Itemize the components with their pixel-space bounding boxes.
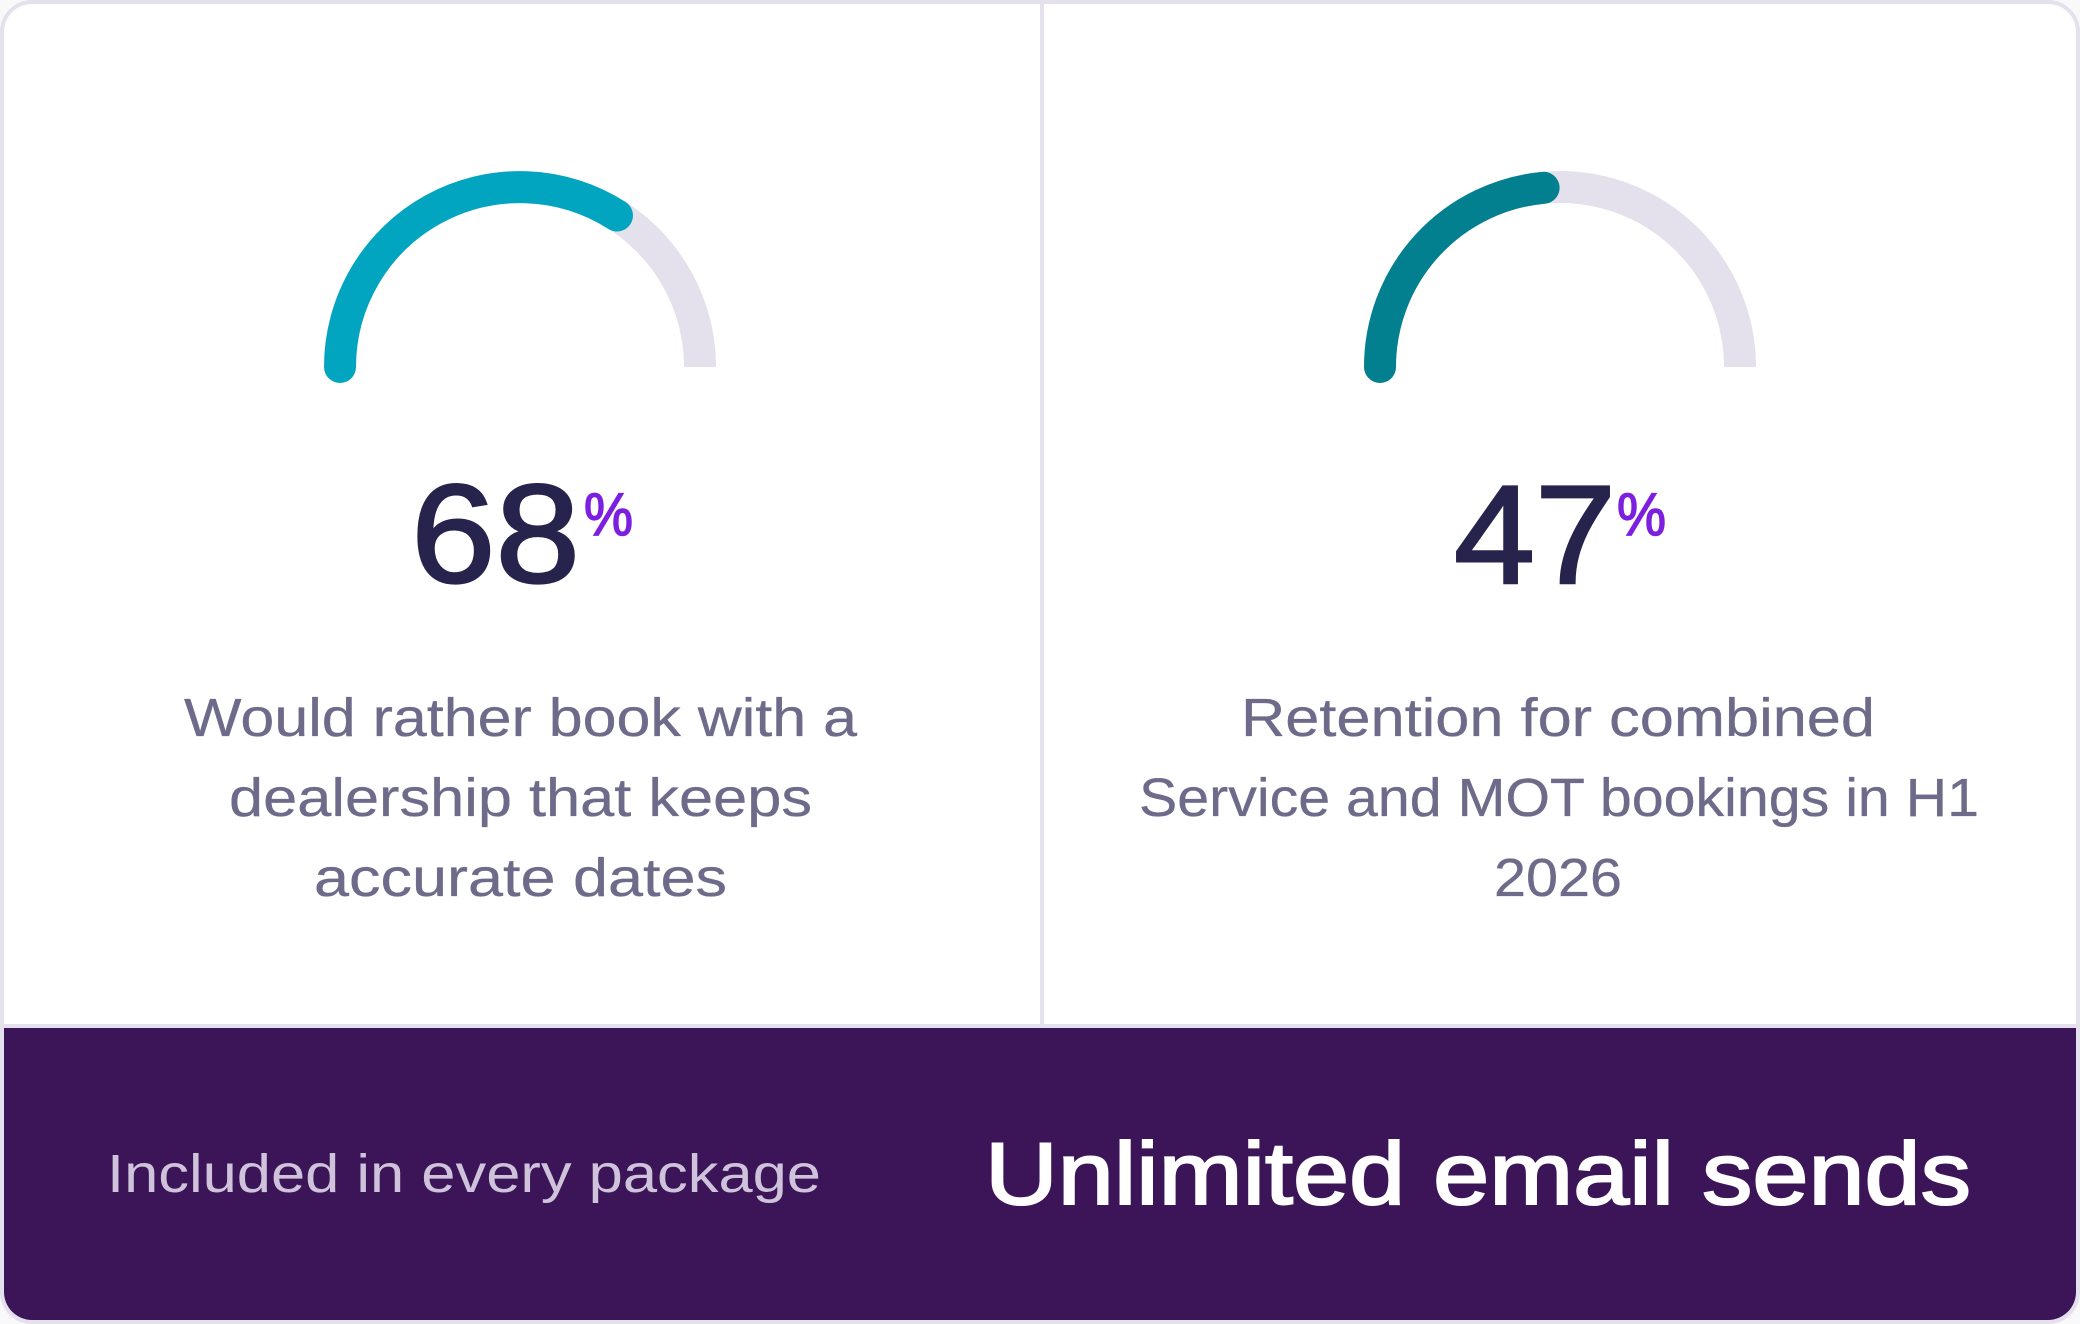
text: 47 percent description: 2026: [1494, 848, 1622, 908]
text: 68 percent description: Would rather book with a: [184, 688, 858, 748]
text: 68 percent description: dealership that keeps: [229, 768, 812, 828]
panel: 68 percent stat: [184, 187, 858, 908]
text: 68 percent description: accurate dates: [314, 848, 727, 908]
text: 68 percent description: [184, 688, 858, 908]
text: banner label: Included in every package: [107, 1144, 821, 1204]
text: 47 percent description: Retention for combined: [1241, 688, 1875, 748]
number: 47%: %: [1617, 481, 1666, 548]
text: 47 percent description: Service and MOT bookings in H1: [1139, 768, 1979, 828]
panel: bottom banner: [4, 1028, 2076, 1320]
panel: 47 percent stat: [1139, 187, 1979, 908]
gauge: 47 percent: [1380, 187, 1740, 367]
number: 68%: %: [584, 481, 633, 548]
text: 47 percent description: [1139, 688, 1979, 908]
gauge: 68 percent: [340, 187, 700, 367]
text: banner headline: Unlimited email sends: [985, 1124, 1971, 1223]
number: 68%: 68: [411, 455, 580, 612]
number: 47%: 47: [1454, 456, 1616, 613]
